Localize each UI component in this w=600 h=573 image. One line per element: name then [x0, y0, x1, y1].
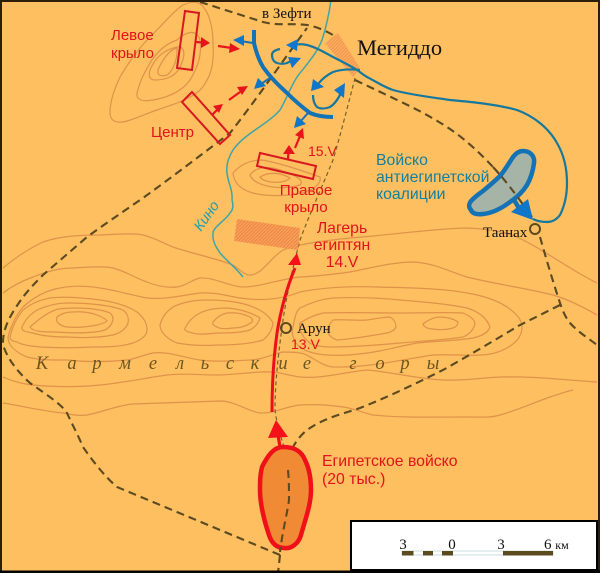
right wing formation [257, 153, 316, 179]
scale labels: 3 [399, 537, 407, 553]
red attack arrows [196, 37, 304, 159]
label: 13 May: 13.V [291, 336, 320, 352]
label: coalition army: коалиции [376, 186, 445, 203]
Egyptian army [260, 253, 311, 552]
scale unit: 6 км [544, 537, 569, 553]
label: Kishon river: Кино [191, 198, 223, 234]
label: to Zefti: в Зефти [262, 6, 312, 22]
Anti-Egyptian coalition army [469, 151, 534, 220]
coalition oval [469, 151, 534, 214]
contour lines: hills and Carmel range [3, 2, 597, 417]
label: Megiddo: Мегиддо [357, 35, 442, 60]
arrow north from army [278, 435, 280, 447]
blue manoeuvre route [272, 44, 567, 222]
label: coalition army: Войско [376, 152, 428, 169]
label: Egyptian camp: Лагерь [317, 220, 367, 237]
army oval [260, 447, 311, 548]
scale labels: 3 [497, 537, 505, 553]
label: left wing: крыло [111, 45, 154, 62]
blue arrowheads [286, 39, 345, 98]
label: Egyptian army: Египетское войско [322, 453, 458, 470]
label: Taanach: Таанах [483, 225, 528, 241]
label: Egyptian camp: 14.V [326, 254, 359, 271]
Canaanite battle line [254, 30, 333, 117]
left wing formation [177, 11, 199, 70]
town: Taanach marker [530, 224, 540, 234]
label: Arun: Арун [297, 321, 331, 337]
Egyptian camp [234, 219, 300, 250]
label: coalition army: антиегипетской [376, 169, 489, 186]
label: centre: Центр [151, 124, 194, 141]
label: right wing: Правое [280, 182, 332, 199]
label: Carmel mountains: Кармельскиегоры [35, 354, 439, 374]
scale box [351, 521, 597, 570]
Megiddo site marker [325, 33, 360, 77]
label: right wing: крыло [284, 199, 328, 216]
label: 15 May: 15.V [308, 143, 337, 159]
label: left wing: Левое [111, 27, 154, 44]
road through army [280, 470, 289, 552]
scale labels: 0 [448, 537, 456, 553]
town: Arun marker [281, 323, 291, 333]
road over coalition [493, 167, 532, 217]
blue counter-attack arrows [233, 35, 308, 128]
centre formation [182, 92, 230, 144]
arrow towards Taanach [513, 198, 520, 210]
label: Egyptian camp: египтян [314, 237, 370, 254]
scale bar [402, 551, 553, 556]
river Kishon [213, 0, 331, 277]
thin dashed road to Megiddo [275, 78, 355, 450]
main red advance arrow [272, 268, 295, 412]
label: Egyptian army: (20 тыс.) [322, 471, 385, 488]
